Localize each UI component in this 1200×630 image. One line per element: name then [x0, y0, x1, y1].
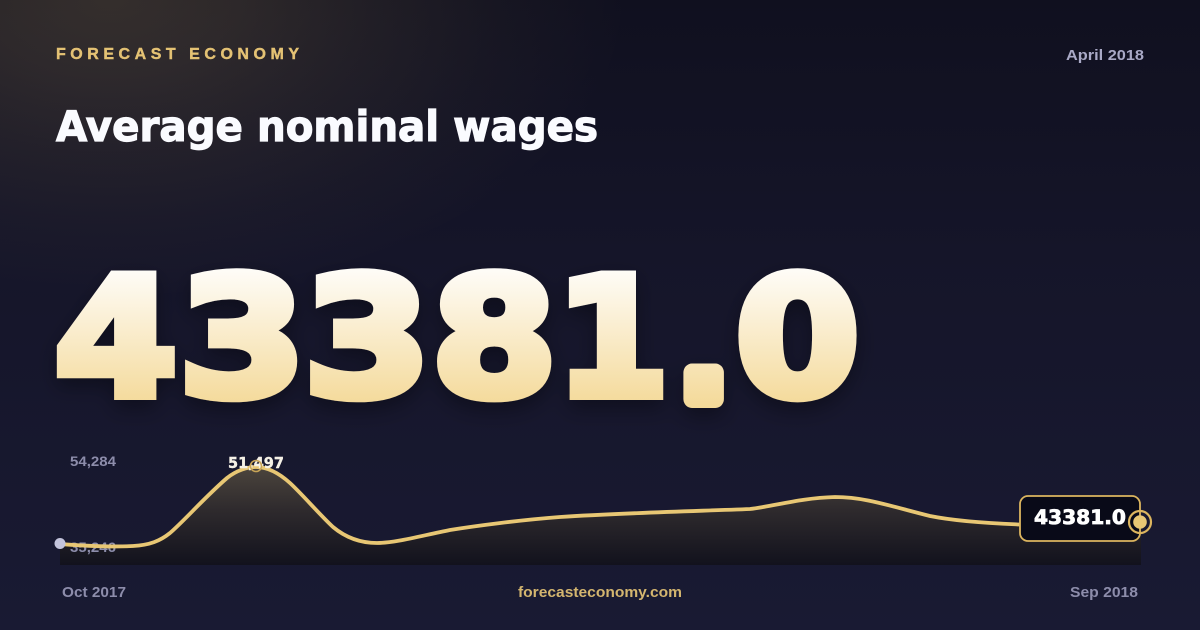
start date label: Oct 2017 — [62, 584, 126, 601]
headline value: 8 — [432, 243, 557, 434]
headline value: 1 — [555, 243, 670, 434]
latest point marker — [1129, 511, 1151, 533]
axis min label: 35,246 — [70, 539, 116, 555]
axis max label: 54,284 — [70, 453, 116, 469]
brand label: FORECAST ECONOMY — [56, 46, 299, 63]
headline value: 3 — [303, 243, 431, 435]
peak marker — [250, 460, 262, 472]
website: forecasteconomy.com — [518, 584, 682, 601]
latest value callout: 43381.0 — [1034, 506, 1126, 529]
start point — [54, 538, 66, 549]
headline value — [54, 243, 860, 435]
headline value: 0 — [735, 244, 860, 434]
date label: April 2018 — [1066, 47, 1144, 64]
title: Average nominal wages — [56, 102, 598, 151]
chart area fill — [60, 467, 1141, 565]
headline value: 3 — [178, 243, 306, 435]
chart line — [60, 467, 1020, 546]
headline value: 4 — [54, 244, 178, 434]
end date label: Sep 2018 — [1070, 584, 1138, 601]
headline value: . — [678, 270, 729, 433]
line chart — [54, 453, 1151, 565]
latest value callout — [1020, 496, 1140, 541]
peak label: 51,497 — [228, 454, 284, 472]
